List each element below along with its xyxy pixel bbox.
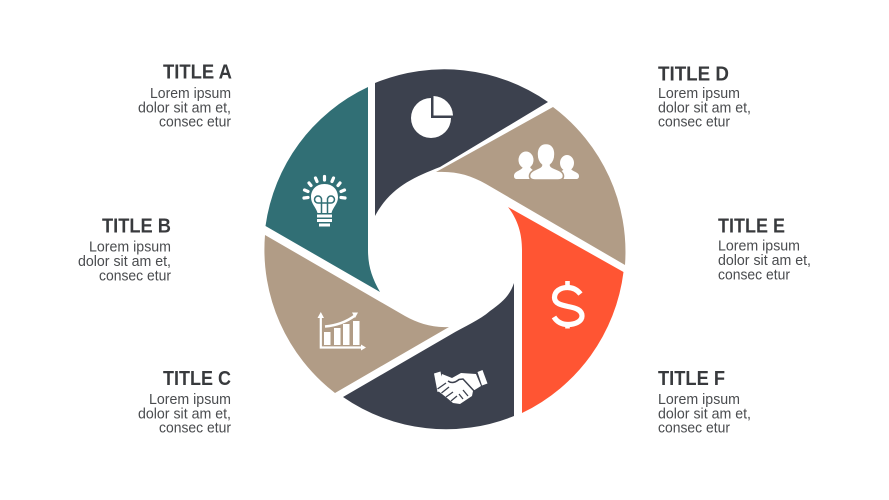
text block: title E: consec etur [718, 267, 790, 283]
text block: title E: dolor sit am et, [718, 253, 811, 269]
segment F: dark bottom [343, 283, 514, 429]
text block: title A: Lorem ipsum [150, 86, 231, 102]
icon: dollar sign [554, 281, 582, 328]
icon: bar chart [318, 312, 366, 350]
segment D: tan right top [436, 107, 625, 265]
text block: title C: consec etur [159, 421, 231, 437]
text block: title E [718, 216, 811, 283]
icon: people [514, 144, 579, 180]
text block: title E: TITLE E [718, 216, 785, 238]
text block: title B: TITLE B [102, 216, 171, 238]
text block: title B: Lorem ipsum [89, 240, 171, 256]
text block: title C [138, 368, 231, 437]
text block: title C: dolor sit am et, [138, 406, 231, 422]
text block: title A: dolor sit am et, [138, 100, 231, 116]
text block: title F [658, 368, 751, 437]
text block: title E: Lorem ipsum [718, 239, 800, 255]
icon: light bulb [304, 176, 345, 226]
segment C: tan left bottom [264, 235, 449, 393]
segment: dark top [375, 69, 548, 216]
text block: title C: Lorem ipsum [149, 392, 231, 408]
icon: pie chart [411, 96, 453, 138]
text block: title F: TITLE F [658, 368, 725, 390]
text block: title D: Lorem ipsum [658, 86, 740, 102]
segment A: teal [266, 87, 380, 292]
icon: handshake [434, 370, 488, 404]
text block: title B [78, 216, 171, 284]
text block: title B: consec etur [99, 268, 171, 284]
segment E: orange [508, 207, 624, 413]
text block: title A: TITLE A [163, 62, 232, 84]
text block: title C: TITLE C [163, 368, 231, 390]
text block: title D [658, 64, 751, 131]
text block: title F: dolor sit am et, [658, 406, 751, 422]
text block: title D: TITLE D [658, 64, 729, 86]
text block: title F: consec etur [658, 421, 730, 437]
text block: title A: consec etur [159, 115, 231, 131]
text block: title D: consec etur [658, 115, 730, 131]
text block: title D: dolor sit am et, [658, 100, 751, 116]
text block: title A [138, 62, 232, 131]
text block: title F: Lorem ipsum [658, 392, 740, 408]
text block: title B: dolor sit am et, [78, 254, 171, 270]
